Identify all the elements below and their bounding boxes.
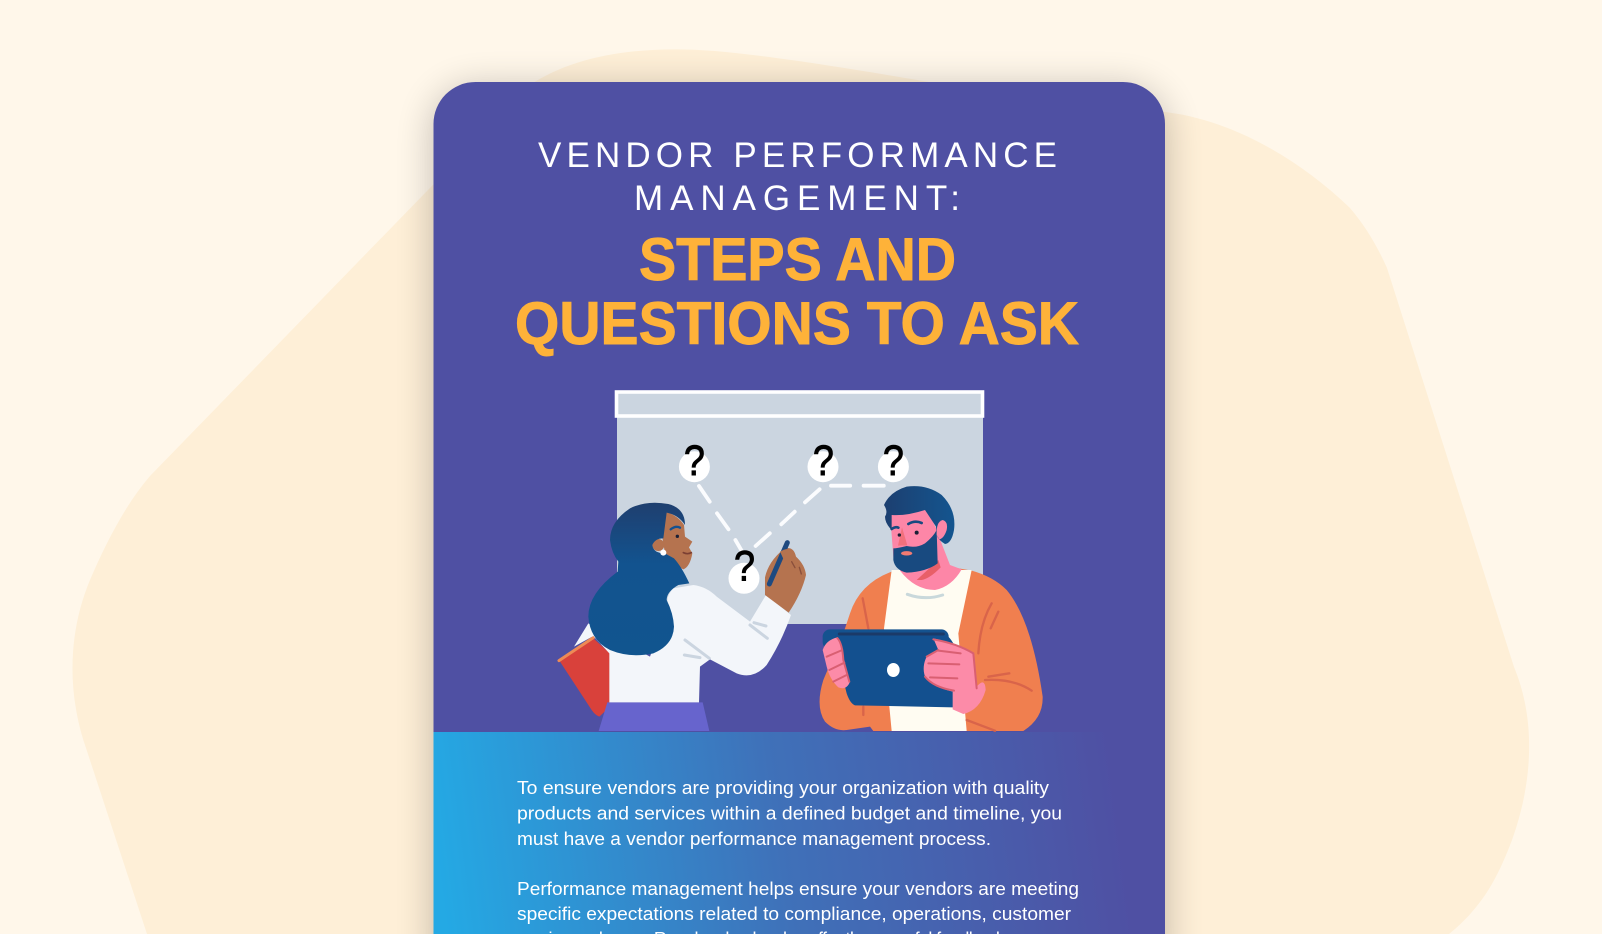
jacket <box>820 563 1043 731</box>
title: light lines: VENDOR PERFORMANCE <box>538 136 1057 175</box>
title: bold lines: STEPS AND <box>639 226 956 293</box>
hand with pen <box>765 543 806 613</box>
collar <box>907 594 943 598</box>
jacket creases <box>863 598 1032 731</box>
shirt <box>574 585 791 702</box>
sleeve creases <box>684 623 767 658</box>
title: bold lines <box>515 226 1079 357</box>
title: bold lines: QUESTIONS TO ASK <box>515 290 1079 357</box>
question marks: ? <box>734 542 755 590</box>
question marks: ? <box>684 437 705 485</box>
paragraph one <box>517 778 1062 849</box>
card panel <box>433 82 1165 934</box>
illustration <box>559 392 1043 731</box>
neck <box>900 535 962 590</box>
left hand <box>823 637 850 688</box>
intro text block <box>517 778 1079 924</box>
right hand <box>924 638 986 714</box>
dashed connector lines <box>699 486 884 552</box>
paragraph two: Performance management helps ensure your vendors are meeting <box>517 879 1079 899</box>
skirt <box>599 702 709 731</box>
question marks: ? <box>883 437 904 485</box>
paragraph one: must have a vendor performance management process. <box>517 829 991 849</box>
paragraph two: specific expectations related to compliance, operations, customer <box>517 904 1071 924</box>
paragraph one: products and services within a defined budget and timeline, you <box>517 804 1062 824</box>
hair <box>884 486 954 544</box>
whiteboard <box>616 392 983 624</box>
face <box>890 508 940 570</box>
man figure <box>820 486 1043 731</box>
tablet <box>823 629 953 707</box>
question marks <box>679 437 909 594</box>
card shadow <box>434 88 1165 934</box>
panel: gradient intro section <box>434 732 1165 934</box>
paragraph one: To ensure vendors are providing your organization with quality <box>517 778 1049 798</box>
title <box>515 136 1079 357</box>
paragraph two <box>517 879 1079 924</box>
beard <box>893 530 938 573</box>
white t-shirt <box>884 570 972 731</box>
earring <box>660 550 666 556</box>
woman figure <box>559 503 806 731</box>
ear <box>937 520 947 539</box>
title: light lines <box>538 136 1057 218</box>
title: light lines: MANAGEMENT: <box>634 179 960 218</box>
hair <box>588 503 689 655</box>
red folder <box>559 638 610 717</box>
question marks: ? <box>813 437 834 485</box>
neck and face <box>652 512 692 569</box>
